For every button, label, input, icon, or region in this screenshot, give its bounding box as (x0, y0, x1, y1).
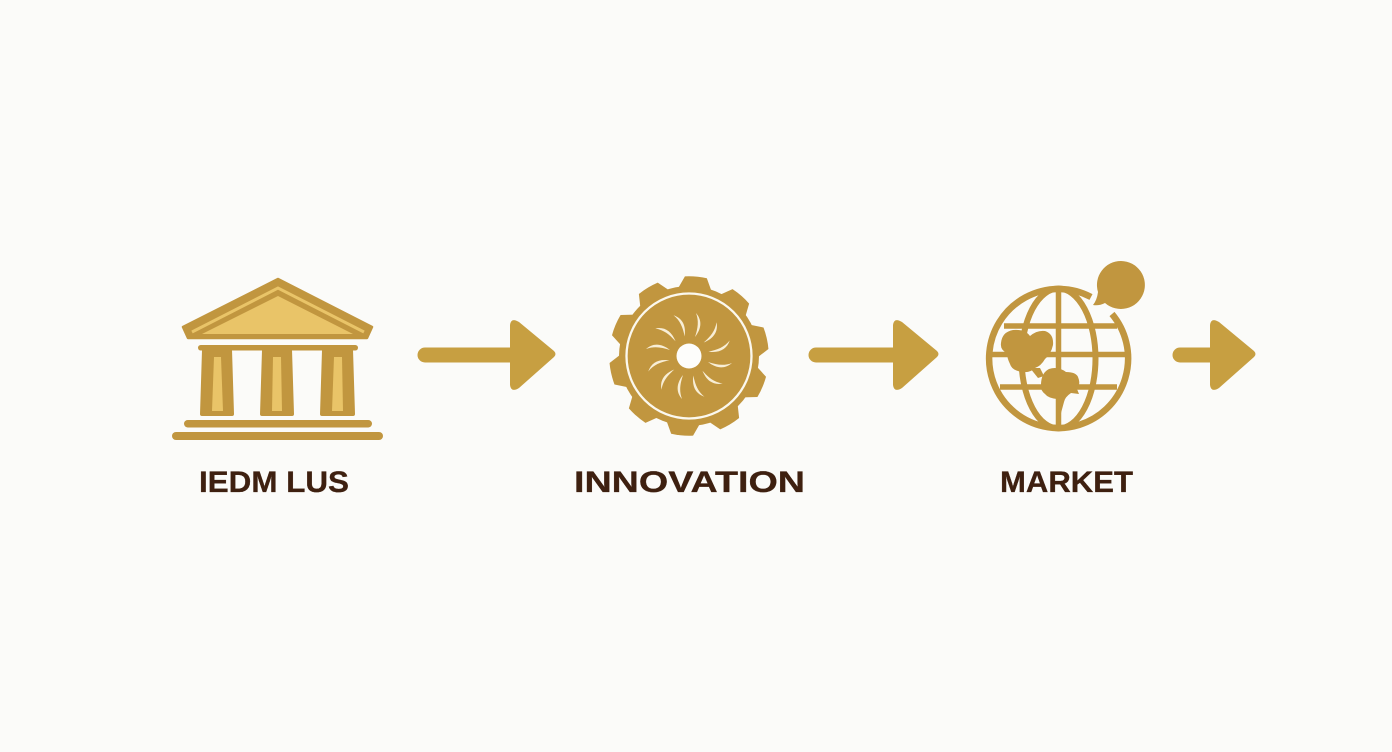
icon: globe with speech bubble (989, 261, 1145, 428)
label: MARKET: MARKET (1000, 466, 1133, 499)
speech bubble (1093, 261, 1145, 309)
label: IEDM LUS: IEDM LUS (199, 466, 349, 499)
icon: classical temple (172, 279, 383, 440)
label: INNOVATION: INNOVATION (574, 466, 805, 499)
icon: gear with turbine blades (607, 275, 771, 437)
continents (1001, 330, 1053, 372)
gear teeth (607, 275, 771, 437)
arrow: temple to gear (418, 320, 556, 390)
arrow: globe onward (1173, 320, 1256, 390)
turbine blades (646, 313, 732, 399)
arrow: gear to globe (808, 320, 938, 390)
